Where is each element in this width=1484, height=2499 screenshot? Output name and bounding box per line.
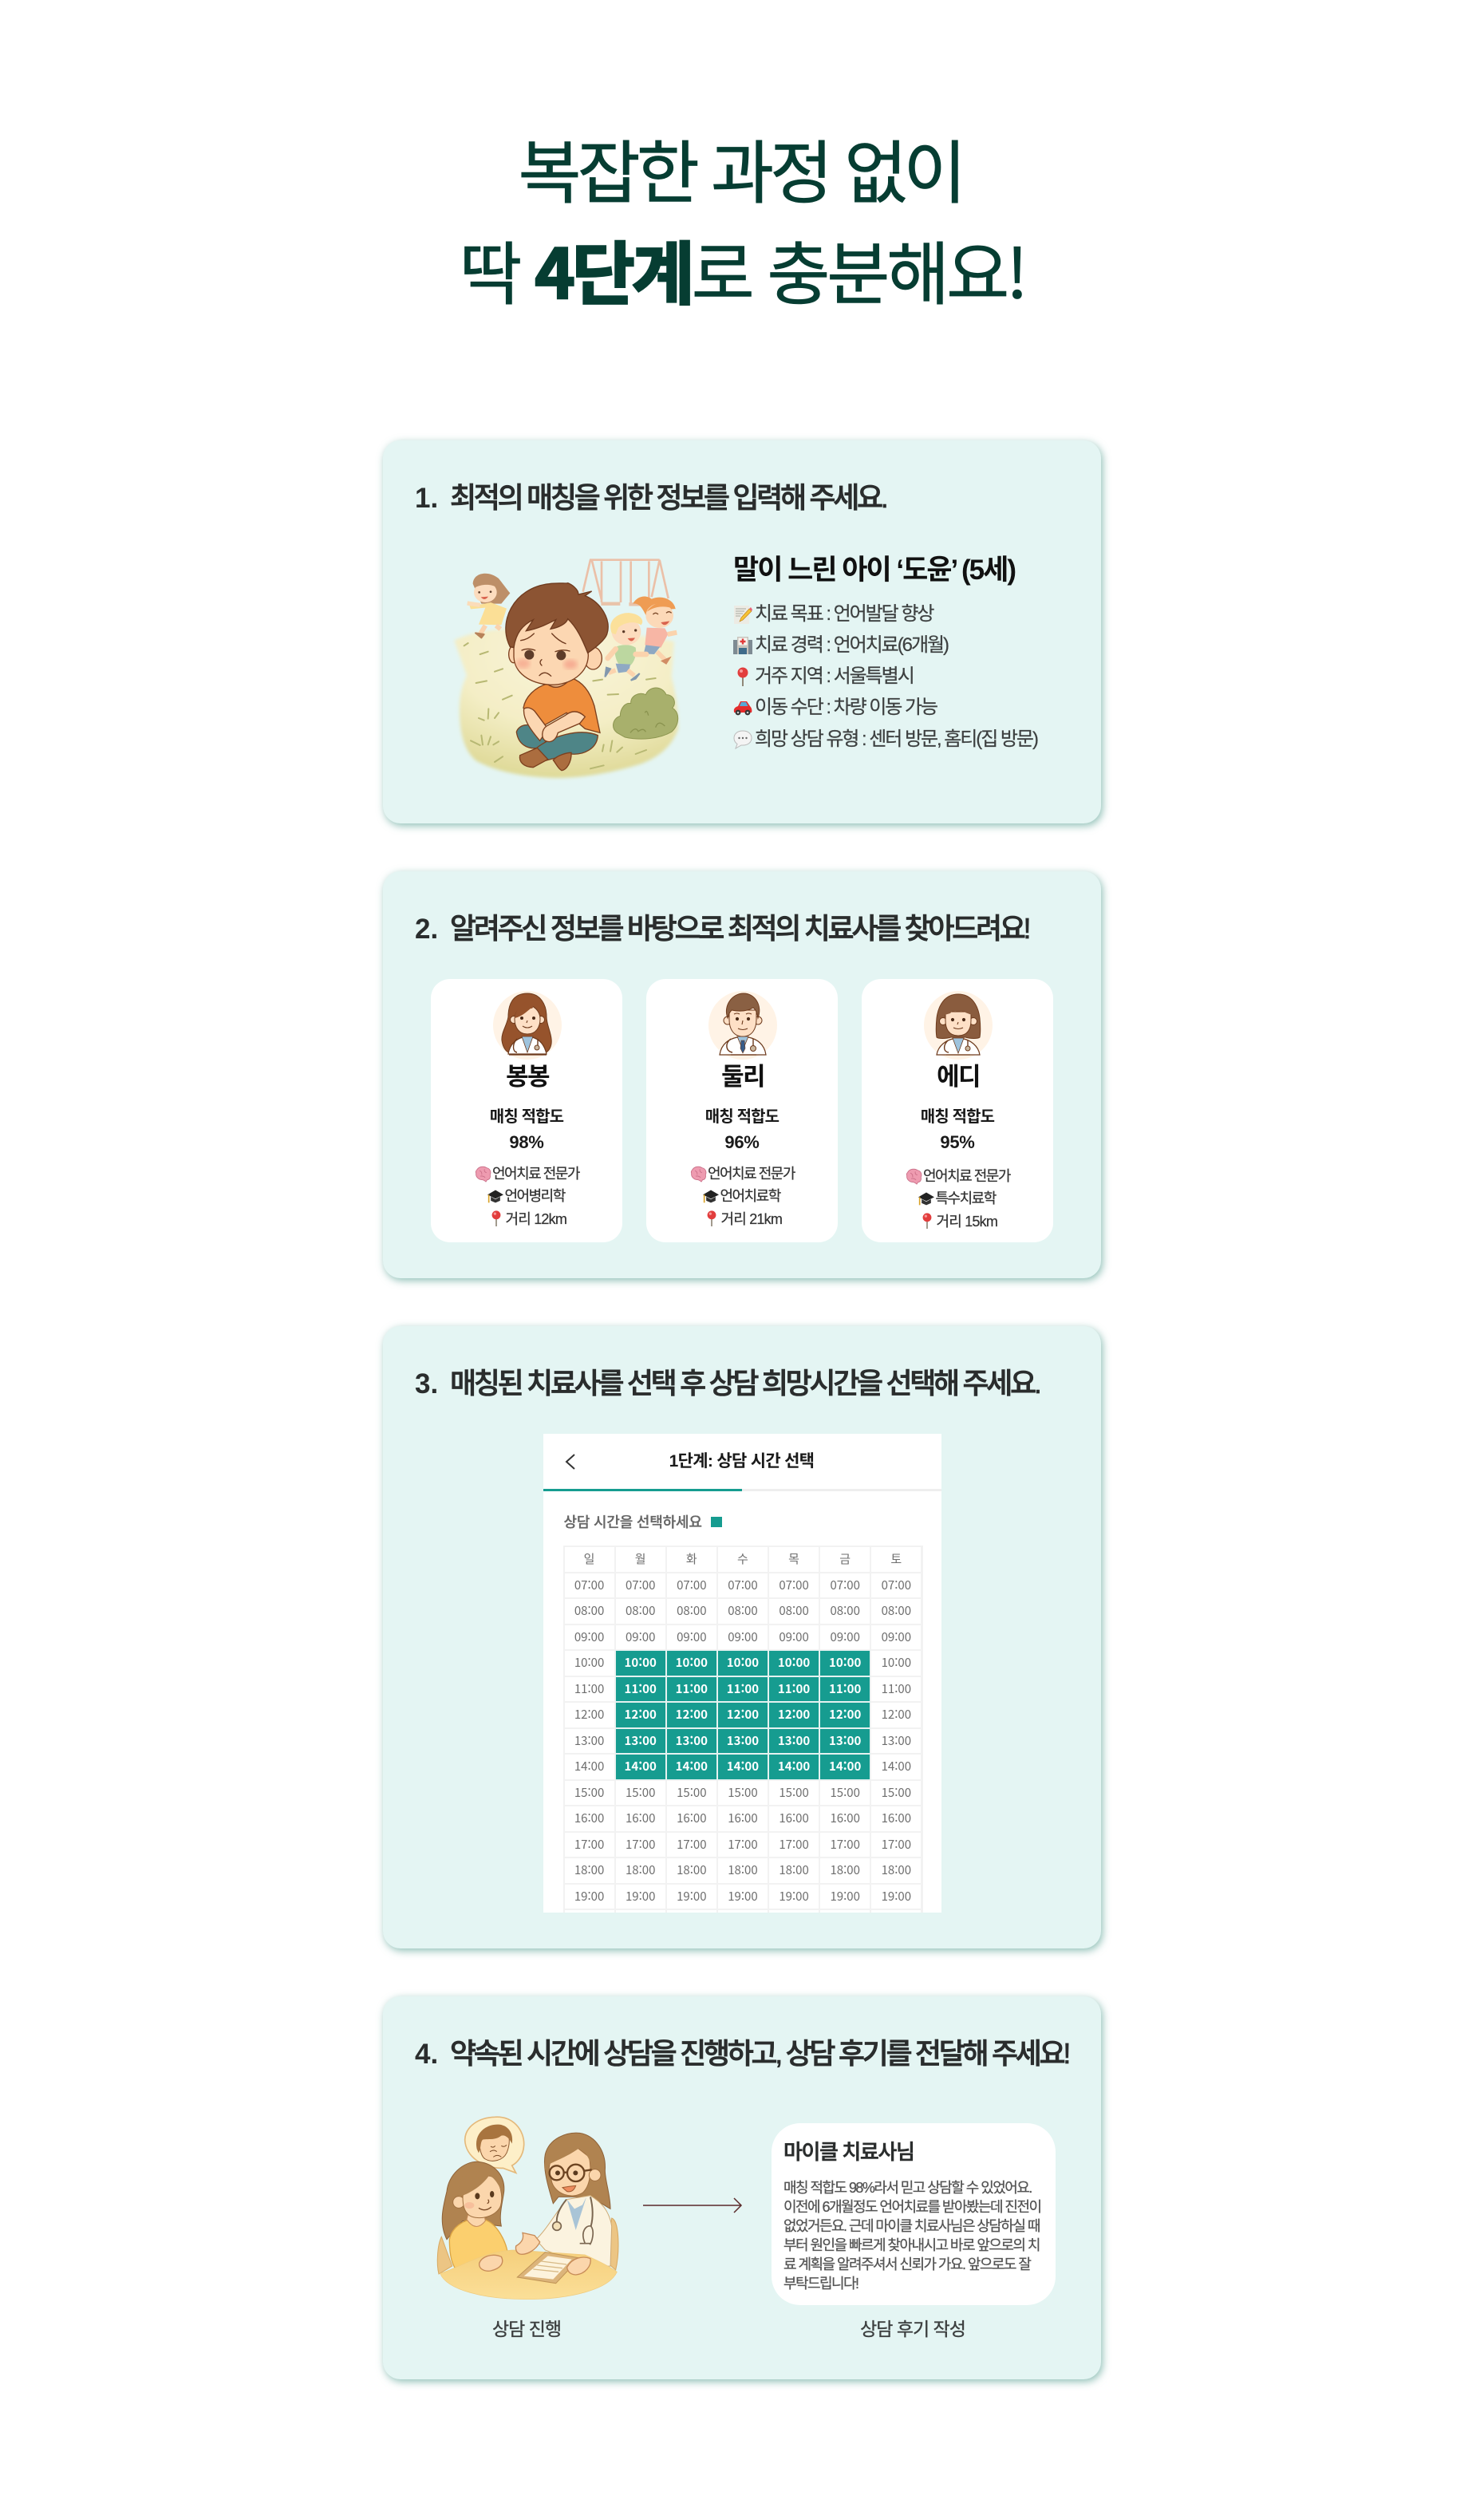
bush [614,688,678,739]
schedule table: 18:00 [830,1861,860,1878]
panel: step 4 [383,1996,1101,2379]
icon: graduation cap [487,1190,503,1203]
schedule table: 07:00 [574,1577,604,1593]
schedule table: 12:00 [574,1706,604,1723]
heading: step 4: 약속된 시간에 상담을 진행하고, 상담 후기를 전달해 주세요! [450,2037,1068,2070]
schedule table: 13:00 [574,1731,604,1749]
icon: pin [491,1210,501,1226]
icon: hospital [733,637,752,654]
schedule table: 금 [839,1550,851,1567]
icon: memo [734,606,752,624]
schedule table: 17:00 [779,1835,809,1853]
table [440,2250,617,2300]
fit value: 96% [724,1132,760,1152]
mother sweater [449,2220,508,2272]
boy shirt [523,678,600,732]
specialty: 언어치료 전문가 [492,1166,579,1182]
schedule table: 12:00 [778,1706,810,1723]
schedule table: 14:00 [778,1758,810,1775]
boy legs [516,725,548,748]
specialty: 언어치료 전문가 [923,1168,1010,1184]
doctor hair back [544,2133,610,2209]
name: 둘리 [721,1063,764,1091]
schedule table: 14:00 [829,1758,861,1775]
boy arms [524,708,548,740]
schedule table: 화 [686,1550,697,1567]
schedule table: 09:00 [779,1628,809,1645]
label: write review: 상담 후기 작성 [860,2319,965,2339]
schedule table: 18:00 [677,1861,707,1878]
doctor face [549,2148,590,2196]
schedule table: 10:00 [882,1654,911,1671]
schedule table: 15:00 [882,1784,911,1800]
label: consultation: 상담 진행 [492,2319,561,2339]
card: therapist 봉봉 [431,979,622,1242]
major: 언어치료학 [720,1188,780,1204]
title line 2: 딱 4단계로 충분해요! [459,219,1025,318]
schedule table: 08:00 [574,1602,604,1619]
schedule table: 월 [635,1550,646,1567]
schedule table: 10:00 [778,1654,810,1671]
legend: selected colour [711,1517,722,1527]
schedule table: 13:00 [727,1731,759,1749]
ground [454,629,678,778]
icon: graduation cap [703,1190,719,1203]
schedule table: 07:00 [830,1577,860,1593]
schedule table: 10:00 [625,1654,657,1671]
card: therapist 둘리 [646,979,838,1242]
schedule table: 18:00 [626,1861,655,1878]
specialty: 언어치료 전문가 [708,1166,795,1182]
fit label: 매칭 적합도 [921,1108,994,1126]
mother hair back [442,2161,504,2240]
panel: step 3 [383,1326,1101,1948]
doctor hands [515,2233,540,2254]
schedule table: 12:00 [676,1706,708,1723]
panel: step 2 [383,871,1101,1278]
heading: step 3: 매칭된 치료사를 선택 후 상담 희망시간을 선택해 주세요. [450,1367,1040,1400]
progress bar [543,1489,941,1491]
speech bubble [465,2117,524,2173]
schedule table: 16:00 [882,1810,911,1826]
schedule table: 15:00 [626,1784,655,1800]
treatment history: 치료 경력 : 언어치료(6개월) [755,634,948,656]
boy shoes [519,748,548,768]
schedule table: 16:00 [574,1810,604,1826]
schedule table: 18:00 [728,1861,758,1878]
schedule table: 16:00 [779,1810,809,1826]
left girl [468,574,510,638]
schedule table: 17:00 [574,1835,604,1853]
schedule table: 11:00 [676,1680,708,1696]
title line 1: 복잡한 과정 없이 [519,117,962,217]
schedule table: 토 [890,1550,902,1567]
schedule table: 11:00 [829,1680,861,1696]
distance: 거리 15km [937,1214,997,1230]
illustration: consultation [437,2116,619,2300]
icon: pin [737,667,748,686]
icon: car [734,701,752,715]
schedule table: 09:00 [626,1628,655,1645]
schedule table: 07:00 [728,1577,758,1593]
major: 특수치료학 [935,1190,996,1206]
name: 에디 [937,1063,980,1091]
schedule table: 09:00 [677,1628,707,1645]
schedule table: 15:00 [728,1784,758,1800]
fit label: 매칭 적합도 [490,1108,563,1126]
schedule table: 16:00 [626,1810,655,1826]
reviewer title: 마이클 치료사님 [783,2140,914,2164]
review text: 료 계획을 알려주셔서 신뢰가 가요. 앞으로도 잘 [783,2256,1030,2272]
icon: back chevron [565,1454,575,1470]
review text: 없었거든요. 근데 마이클 치료사님은 상담하실 때 [783,2218,1040,2234]
icon: brain [691,1167,707,1182]
schedule table: 12:00 [882,1706,911,1723]
schedule table: 11:00 [574,1680,604,1696]
consultation type: 희망 상담 유형 : 센터 방문, 홈티(집 방문) [755,728,1037,750]
schedule table: 10:00 [676,1654,708,1671]
distance: 거리 12km [506,1211,566,1227]
icon: speech bubble [734,731,752,749]
schedule table: 17:00 [882,1835,911,1853]
avatar: 에디 [924,991,993,1060]
schedule table: 13:00 [625,1731,657,1749]
screen title: 1단계: 상담 시간 선택 [669,1452,814,1471]
review bubble [772,2123,1056,2305]
icon: brain [476,1167,491,1182]
heading: step 1: 1. [415,483,438,514]
schedule table: 17:00 [677,1835,707,1853]
schedule table: 07:00 [626,1577,655,1593]
instruction: 상담 시간을 선택하세요 [563,1514,702,1530]
review text: 이전에 6개월정도 언어치료를 받아봤는데 진전이 [783,2199,1040,2215]
schedule table: 16:00 [728,1810,758,1826]
schedule table: 17:00 [728,1835,758,1853]
schedule table: 11:00 [882,1680,911,1696]
schedule table: 15:00 [677,1784,707,1800]
schedule table: 13:00 [676,1731,708,1749]
schedule table: 15:00 [779,1784,809,1800]
panel: step 1 [383,440,1101,823]
grass tufts [464,643,656,768]
schedule table: 11:00 [625,1680,657,1696]
schedule table: 14:00 [882,1758,911,1775]
schedule table: 14:00 [676,1758,708,1775]
heading: step 4: 4. [415,2039,438,2070]
schedule table [563,1546,922,1936]
schedule table: 12:00 [625,1706,657,1723]
fit value: 95% [940,1132,975,1152]
major: 언어병리학 [504,1188,565,1204]
schedule table: 07:00 [882,1577,911,1593]
fit value: 98% [509,1132,544,1152]
swing [583,560,669,604]
schedule table: 13:00 [882,1731,911,1749]
boy features [524,650,534,660]
region: 거주 지역 : 서울특별시 [755,665,914,687]
schedule table: 16:00 [830,1810,860,1826]
schedule table: 14:00 [625,1758,657,1775]
distance: 거리 21km [721,1211,782,1227]
schedule table: 09:00 [882,1628,911,1645]
boy hair [506,583,608,653]
schedule table: 08:00 [882,1602,911,1619]
schedule table: 08:00 [728,1602,758,1619]
name: 봉봉 [506,1063,549,1091]
schedule table: 09:00 [574,1628,604,1645]
treatment goal: 치료 목표 : 언어발달 향상 [755,603,933,625]
mother face [453,2197,464,2208]
review text [783,2180,1040,2292]
schedule table: 08:00 [626,1602,655,1619]
schedule table: 19:00 [626,1888,655,1904]
schedule table: 13:00 [778,1731,810,1749]
review text: 부터 원인을 빠르게 찾아내시고 바로 앞으로의 치 [783,2237,1040,2253]
schedule table: 11:00 [778,1680,810,1696]
doctor coat [536,2196,612,2268]
schedule table: 17:00 [830,1835,860,1853]
heading: step 2: 알려주신 정보를 바탕으로 최적의 치료사를 찾아드려요! [450,912,1028,945]
blond boy [605,613,646,681]
schedule table: 일 [584,1550,594,1567]
review text: 매칭 적합도 98%라서 믿고 상담할 수 있었어요. [783,2180,1032,2196]
profile name: 말이 느린 아이 ‘도윤’ (5세) [733,555,1015,586]
heading: step 3: 3. [415,1368,438,1400]
schedule table: 17:00 [626,1835,655,1853]
app screen: time picker [543,1434,941,1913]
schedule table: 14:00 [574,1758,604,1775]
schedule table: 09:00 [728,1628,758,1645]
schedule table: 18:00 [574,1861,604,1878]
schedule table: 19:00 [882,1888,911,1904]
heading: step 2: 2. [415,914,438,945]
schedule table: 08:00 [779,1602,809,1619]
arrow [643,2197,742,2213]
schedule table: 15:00 [830,1784,860,1800]
heading: step 1: 최적의 매칭을 위한 정보를 입력해 주세요. [450,481,886,514]
transport: 이동 수단 : 차량 이동 가능 [755,697,937,718]
schedule table: 07:00 [779,1577,809,1593]
schedule table: 14:00 [727,1758,759,1775]
doctor glasses [550,2165,592,2181]
schedule table: 수 [737,1550,748,1567]
bubble: child face [479,2127,509,2161]
schedule table: 18:00 [779,1861,809,1878]
icon: brain [906,1168,922,1185]
review text: 부탁드립니다! [783,2276,858,2292]
schedule table: 19:00 [779,1888,809,1904]
red-hair girl [633,596,677,664]
schedule table: 12:00 [727,1706,759,1723]
schedule table: 13:00 [829,1731,861,1749]
schedule table: 16:00 [677,1810,707,1826]
schedule table: 10:00 [829,1654,861,1671]
schedule table: 09:00 [830,1628,860,1645]
schedule table: 12:00 [829,1706,861,1723]
clipboard [517,2252,580,2284]
schedule table: 08:00 [830,1602,860,1619]
schedule table: 10:00 [727,1654,759,1671]
schedule table: 18:00 [882,1861,911,1878]
icon: pin [922,1213,932,1229]
schedule table: 19:00 [830,1888,860,1904]
schedule table: 11:00 [727,1680,759,1696]
fit label: 매칭 적합도 [705,1108,779,1126]
schedule table: 19:00 [677,1888,707,1904]
icon: pin [707,1210,716,1226]
schedule table: 07:00 [677,1577,707,1593]
schedule table: 10:00 [574,1654,604,1671]
boy ears and face [509,645,519,663]
schedule table: 08:00 [677,1602,707,1619]
card: therapist 에디 [862,979,1053,1242]
illustration: sad boy on playground [453,559,680,780]
schedule table: 15:00 [574,1784,604,1800]
schedule table: 목 [788,1550,799,1567]
avatar: 봉봉 [493,991,562,1060]
avatar: 둘리 [708,991,777,1060]
chairs [437,2236,452,2274]
schedule table: 19:00 [728,1888,758,1904]
mother hands [480,2255,503,2271]
icon: graduation cap [918,1192,934,1205]
schedule table: 19:00 [574,1888,604,1904]
